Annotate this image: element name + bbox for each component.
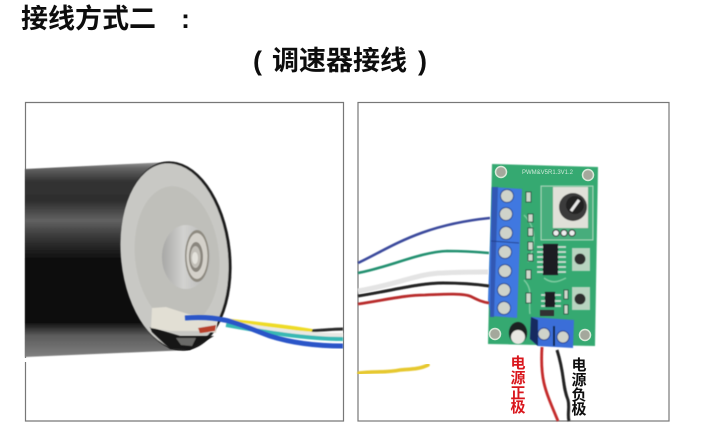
circuit board: [488, 164, 598, 346]
motor body: [25, 162, 190, 357]
yellow marker stroke: [359, 365, 428, 373]
subtitle: speed controller wiring: ): [418, 46, 427, 76]
small components: [526, 192, 568, 314]
label: power negative: 电: [571, 357, 587, 374]
input wires: [358, 218, 490, 304]
label: power positive: 电: [510, 355, 526, 372]
label: power positive: 正: [510, 385, 526, 402]
label: power positive: 源: [510, 370, 526, 387]
board components traces: [524, 215, 566, 314]
title: wiring method two: 接线方式二: [21, 3, 156, 34]
subtitle: speed controller wiring: 调速器接线: [272, 46, 407, 76]
panel: motor photo: [25, 102, 344, 421]
mounting holes: [490, 166, 594, 340]
board label: PWM&V5R1.3V1.2: [522, 170, 574, 176]
seven-way terminal block: [488, 187, 522, 318]
two-way power terminal: [530, 317, 574, 348]
subtitle: speed controller wiring: (: [253, 46, 262, 76]
main chip: [537, 244, 566, 275]
label: power negative: 极: [571, 401, 587, 418]
motor wires: [185, 317, 343, 346]
potentiometer: [541, 186, 593, 240]
title: wiring method two: :: [181, 4, 190, 34]
label: power negative: [571, 357, 587, 418]
motor end face: [111, 156, 241, 356]
label: power positive: 极: [510, 399, 526, 416]
panel: controller board photo: [358, 102, 669, 421]
power wires: [542, 347, 569, 421]
label: power negative: 负: [571, 387, 587, 404]
panel frame left: [26, 102, 344, 421]
label: power negative: 源: [571, 372, 587, 389]
bearing hub: [162, 225, 210, 289]
panel frame right: [358, 102, 669, 421]
capacitor: [509, 322, 527, 344]
push buttons: [572, 248, 590, 310]
label: power positive: [510, 355, 526, 416]
small chip: [540, 292, 561, 316]
cable connector: [150, 307, 218, 350]
